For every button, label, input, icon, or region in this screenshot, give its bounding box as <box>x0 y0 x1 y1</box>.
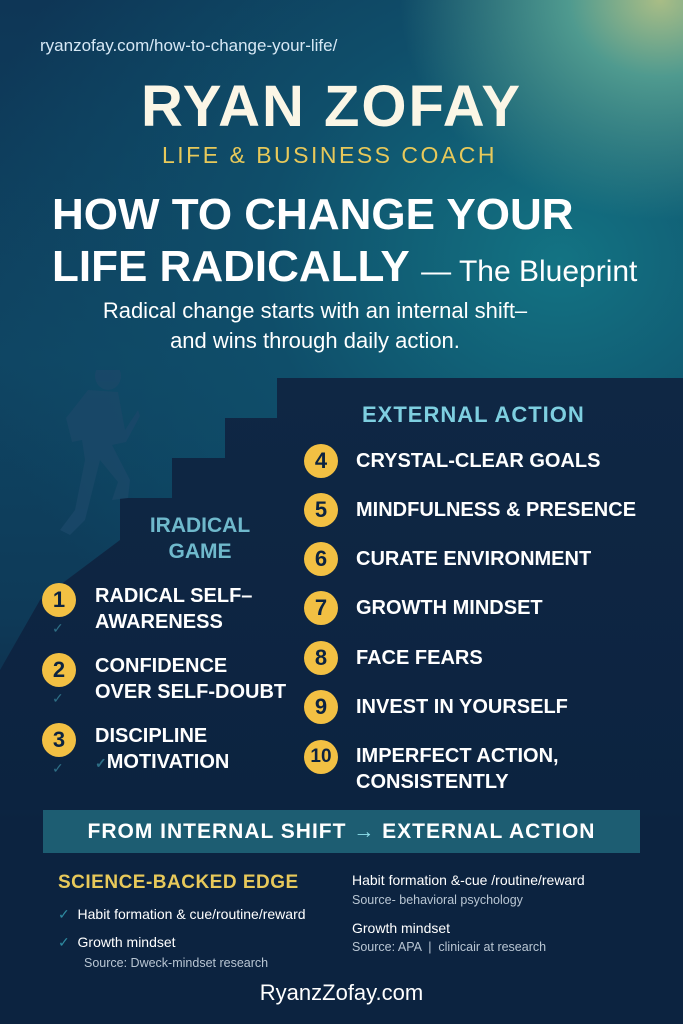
headline: LIFE RADICALLY — The Blueprint <box>52 242 637 291</box>
subtitle coach: LIFE & BUSINESS COACH <box>162 142 497 168</box>
title: RYAN ZOFAY <box>141 74 522 139</box>
banner: FROM INTERNAL SHIFT → EXTERNAL ACTION <box>88 820 595 843</box>
stairs illustration <box>0 370 683 754</box>
internal list: 2 <box>53 657 65 682</box>
research notes: Growth mindset <box>352 920 450 936</box>
external action list: 9 <box>315 694 327 719</box>
internal list: AWARENESS <box>95 611 223 633</box>
external action list: 5 <box>315 497 327 522</box>
internal list <box>42 583 286 776</box>
heading: iradical game: IRADICAL <box>150 514 250 537</box>
tagline <box>103 298 528 353</box>
external action list: MINDFULNESS & PRESENCE <box>356 499 636 521</box>
heading: external action: EXTERNAL ACTION <box>362 402 585 427</box>
external action list: 4 <box>315 448 327 473</box>
internal list: OVER SELF-DOUBT <box>95 681 286 703</box>
internal list: ✓ <box>52 620 64 636</box>
science-backed edge <box>58 872 306 970</box>
external action list: IMPERFECT ACTION, <box>356 745 559 767</box>
external action list: FACE FEARS <box>356 647 483 669</box>
science-backed edge: Source: Dweck-mindset research <box>84 956 268 970</box>
science-backed edge: ✓ Growth mindset <box>58 934 176 950</box>
footer: RyanzZofay.com <box>260 980 423 1005</box>
url: ryanzofay.com/how-to-change-your-life/ <box>40 36 337 55</box>
science-backed edge: ✓ Habit formation & cue/routine/reward <box>58 906 306 922</box>
external action list: 8 <box>315 645 327 670</box>
external action list <box>304 444 636 793</box>
internal list: ✓ <box>52 690 64 706</box>
research notes <box>352 872 585 954</box>
internal list: RADICAL SELF– <box>95 585 252 607</box>
internal list: DISCIPLINE <box>95 725 207 747</box>
external action list: CRYSTAL-CLEAR GOALS <box>356 450 600 472</box>
external action list: INVEST IN YOURSELF <box>356 696 568 718</box>
research notes: Source: APA | clinicair at research <box>352 940 546 954</box>
internal list: ✓MOTIVATION <box>95 751 229 773</box>
external action list: GROWTH MINDSET <box>356 597 543 619</box>
external action list: CURATE ENVIRONMENT <box>356 548 591 570</box>
tagline: Radical change starts with an internal shift– <box>103 298 527 323</box>
internal list: ✓ <box>52 760 64 776</box>
external action list: CONSISTENTLY <box>356 771 509 793</box>
science-backed edge: SCIENCE-BACKED EDGE <box>58 872 299 893</box>
internal list: 1 <box>53 587 65 612</box>
internal list: 3 <box>53 727 65 752</box>
tagline: and wins through daily action. <box>170 328 460 353</box>
figure silhouette <box>60 362 140 535</box>
internal list: CONFIDENCE <box>95 655 227 677</box>
research notes: Source- behavioral psychology <box>352 893 523 907</box>
external action list: 10 <box>310 746 332 767</box>
external action list: 7 <box>315 595 327 620</box>
banner <box>43 810 640 853</box>
headline <box>52 190 638 291</box>
external action list: 6 <box>315 546 327 571</box>
research notes: Habit formation &-cue /routine/reward <box>352 872 585 888</box>
heading: iradical game <box>150 514 250 563</box>
heading: iradical game: GAME <box>168 540 232 563</box>
headline: HOW TO CHANGE YOUR <box>52 190 574 239</box>
